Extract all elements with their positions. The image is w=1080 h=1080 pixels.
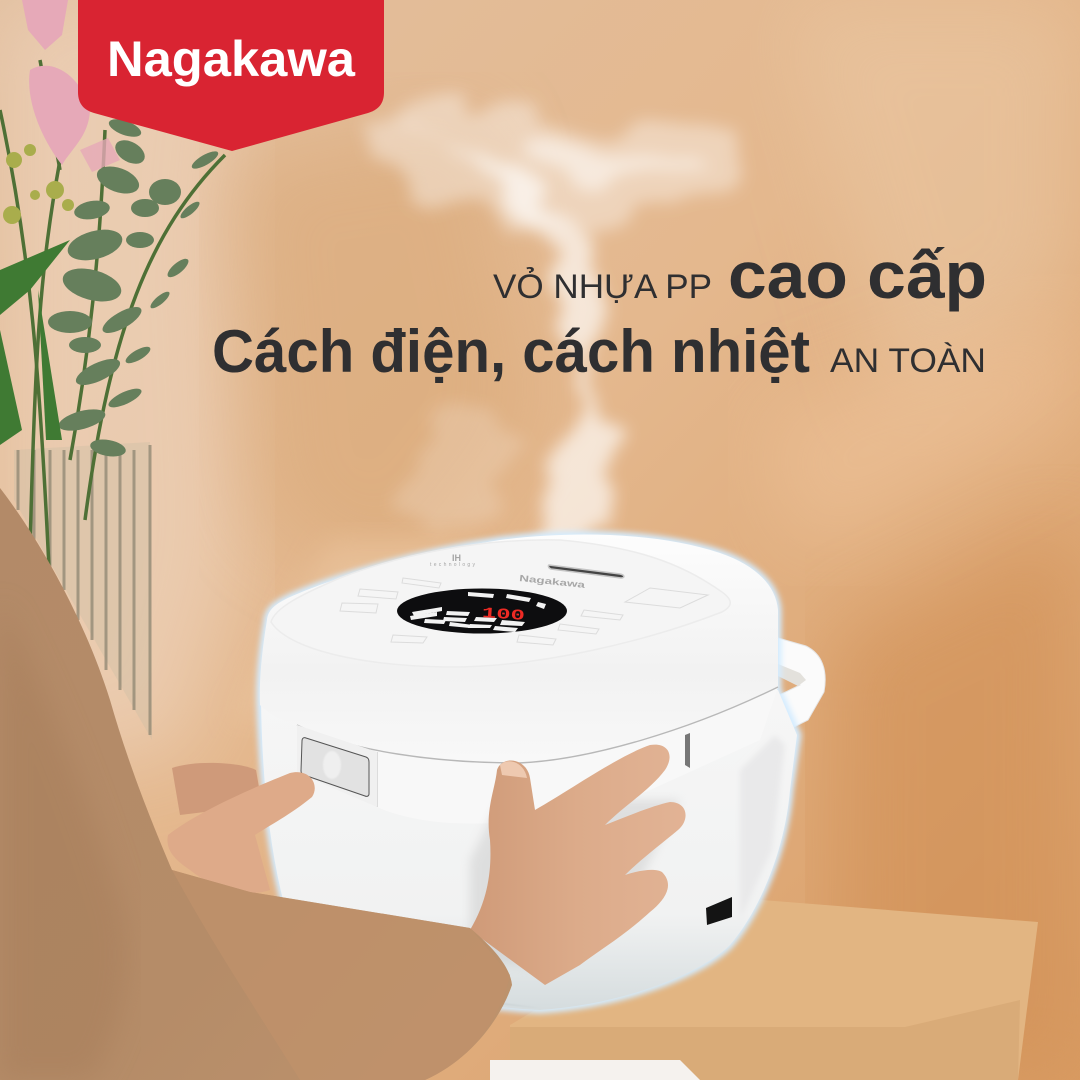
- headline line 1: VỎ NHỰA PP: [493, 268, 712, 306]
- handle: [690, 638, 825, 773]
- hands: [167, 745, 686, 985]
- lower body: [261, 690, 797, 1010]
- button housing: [297, 725, 377, 807]
- upper cap and skirt: [260, 534, 778, 763]
- wooden side table: [490, 897, 1038, 1080]
- vase and plant: [0, 0, 225, 740]
- right lock: [685, 733, 690, 768]
- band seam: [297, 687, 778, 763]
- IH mark: technology: [430, 562, 476, 568]
- steam vent: [548, 565, 624, 578]
- front band: [297, 687, 778, 823]
- rice cooker: [260, 534, 797, 1010]
- IH mark: IH: [452, 553, 461, 563]
- lid panel: [271, 540, 730, 667]
- thumb nail: [500, 761, 527, 778]
- bottom shade: [300, 935, 540, 1008]
- shadow on cooker: [470, 800, 680, 970]
- steam: [370, 90, 740, 545]
- brand on lid: Nagakawa: [519, 573, 587, 590]
- display panel: [397, 588, 567, 634]
- control buttons: [340, 578, 708, 645]
- sleeve and arm: [0, 488, 512, 1080]
- release button: [301, 738, 369, 796]
- red digital readout: 100: [481, 605, 525, 625]
- headline line 2: AN TOÀN: [830, 342, 986, 380]
- glow: [260, 534, 798, 1010]
- power socket: [706, 897, 732, 925]
- brand name: Nagakawa: [107, 31, 356, 87]
- flowers: [22, 0, 120, 172]
- headline line 2: Cách điện, cách nhiệt: [212, 318, 810, 385]
- headline line 1: cao cấp: [728, 238, 987, 312]
- left hand: [167, 763, 315, 893]
- right hand: [470, 745, 686, 985]
- IH mark: [430, 553, 476, 568]
- side panel shade: [740, 735, 785, 920]
